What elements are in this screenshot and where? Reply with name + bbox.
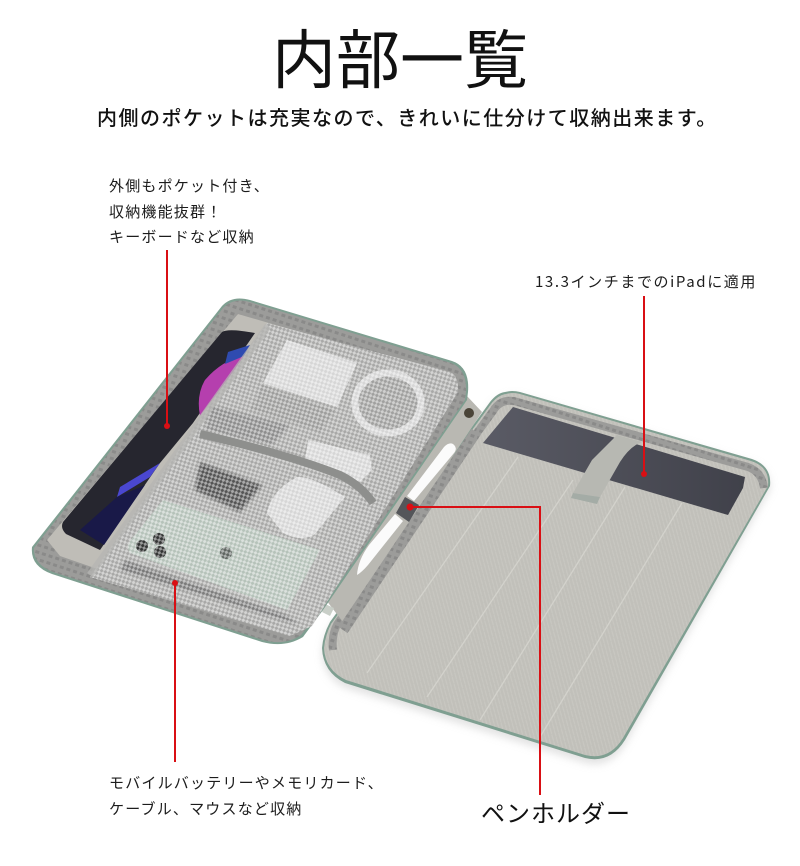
tablet screen colours	[199, 355, 246, 416]
zipper band top and left	[333, 401, 764, 650]
callout line: outside pocket	[164, 250, 170, 429]
right panel of case	[322, 391, 770, 764]
tablet in sleeve	[483, 407, 745, 515]
callout line: iPad	[641, 296, 647, 477]
label: pen holder: ペンホルダー	[481, 794, 631, 829]
left panel of case	[32, 298, 468, 644]
small white block	[305, 440, 372, 482]
callout line: mesh pocket	[172, 580, 178, 762]
mesh pocket	[90, 323, 458, 636]
tablet in back pocket	[62, 330, 255, 550]
elastic strap	[571, 435, 642, 504]
pen slot zipper band	[343, 432, 476, 630]
phone	[128, 500, 320, 610]
pen strip between panels	[322, 395, 482, 630]
dark shadows behind mesh	[195, 462, 262, 512]
mesh overlay	[90, 323, 458, 636]
mouse	[267, 477, 345, 538]
label: outside pocket: 外側もポケット付き、 収納機能抜群！ キーボードなど収納	[109, 175, 270, 247]
zipper pull	[322, 604, 334, 616]
cable coil	[355, 373, 421, 433]
callout line: pen holder	[406, 504, 540, 795]
title: 内部一覧	[272, 10, 528, 102]
label: iPad size: 13.3インチまでのiPadに適用	[535, 271, 757, 292]
charger	[263, 340, 357, 407]
apple pencil	[357, 443, 456, 575]
mesh divider band	[200, 434, 373, 503]
snap button	[464, 408, 474, 418]
subtitle: 内側のポケットは充実なので、きれいに仕分けて収納出来ます。	[97, 102, 718, 131]
inner lining	[47, 314, 456, 636]
quilted fold lines	[367, 457, 682, 737]
phone cameras	[136, 533, 232, 559]
pen holder loop	[396, 497, 419, 522]
label: mesh pocket contents: モバイルバッテリーやメモリカード、 ケーブル、マウスなど収納	[109, 772, 384, 819]
left mesh edge binding	[90, 326, 268, 575]
lining	[324, 393, 768, 756]
